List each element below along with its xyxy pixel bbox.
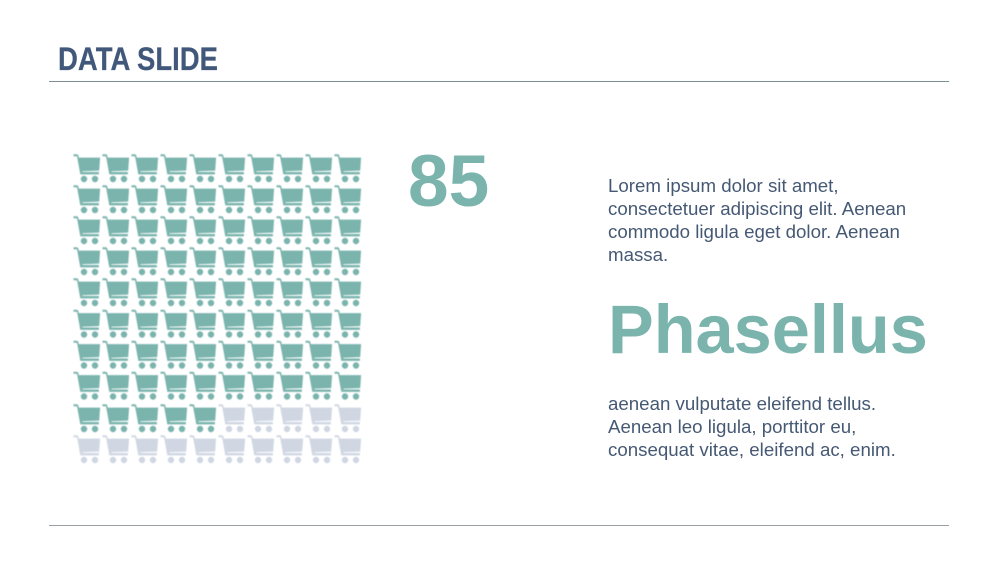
text block: intro paragraph: massa. bbox=[608, 244, 668, 265]
text block: closing paragraph: aenean vulputate eleifend tellus. bbox=[608, 393, 876, 414]
text block: intro paragraph bbox=[608, 175, 906, 265]
text block: intro paragraph: consectetuer adipiscing elit. Aenean bbox=[608, 198, 906, 219]
text block: intro paragraph: commodo ligula eget dolor. Aenean bbox=[608, 221, 900, 242]
text block: closing paragraph bbox=[608, 393, 896, 460]
big word: Phasellus: Phasellus bbox=[608, 291, 928, 368]
text block: intro paragraph: Lorem ipsum dolor sit amet, bbox=[608, 175, 839, 196]
title: DATA SLIDE bbox=[58, 41, 218, 77]
text block: closing paragraph: consequat vitae, eleifend ac, enim. bbox=[608, 439, 896, 460]
text block: closing paragraph: Aenean leo ligula, porttitor eu, bbox=[608, 416, 856, 437]
big number: 85: 85 bbox=[408, 141, 489, 222]
